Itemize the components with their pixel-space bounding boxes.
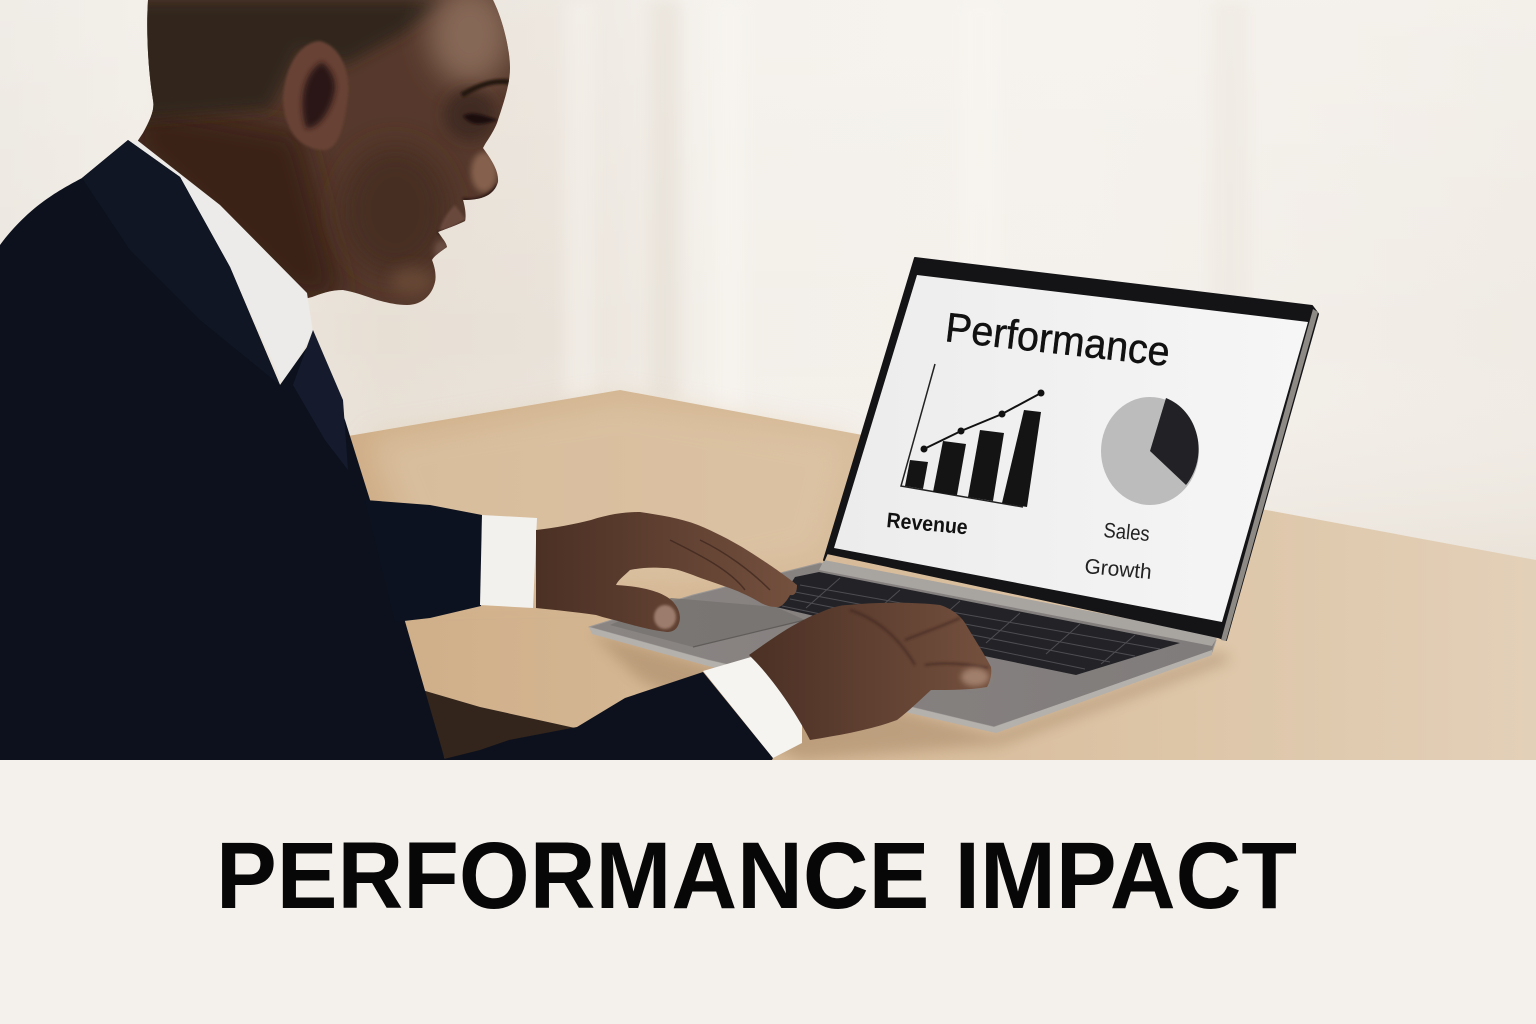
far cuff bbox=[480, 515, 537, 608]
eye socket bbox=[444, 89, 496, 141]
nose highlight bbox=[471, 152, 497, 192]
near hand bbox=[749, 603, 991, 740]
laptop base bbox=[589, 563, 1216, 727]
shirt collar bbox=[130, 140, 313, 385]
screen title: Performance bbox=[943, 304, 1172, 375]
trackpad bbox=[610, 598, 805, 647]
man in suit bbox=[0, 0, 991, 760]
background wall with curtains bbox=[0, 0, 1536, 760]
head and neck bbox=[138, 0, 510, 305]
eye bbox=[463, 113, 498, 124]
near sleeve bbox=[440, 672, 773, 760]
far hand bbox=[536, 512, 797, 632]
far sleeve bbox=[365, 500, 482, 622]
bar chart bbox=[901, 364, 1044, 507]
keyboard bbox=[776, 572, 1180, 675]
label: sales: Sales bbox=[1103, 519, 1151, 546]
suit jacket bbox=[0, 140, 445, 760]
table edge shadow bbox=[422, 690, 575, 760]
title: PERFORMANCE IMPACT bbox=[216, 823, 1297, 929]
wooden table bbox=[348, 390, 1536, 760]
cheek shadow bbox=[340, 145, 450, 275]
ear bbox=[283, 41, 348, 150]
laptop shadow bbox=[590, 632, 1232, 760]
label: revenue: Revenue bbox=[886, 509, 969, 539]
hair bbox=[130, 0, 450, 120]
forehead highlight bbox=[428, 0, 512, 85]
neck shadow bbox=[130, 100, 345, 300]
chin highlight bbox=[390, 268, 434, 296]
lips bbox=[440, 205, 466, 232]
laptop lid bbox=[824, 258, 1318, 640]
pie chart bbox=[1101, 397, 1199, 505]
brow bbox=[462, 82, 510, 95]
laptop bbox=[589, 258, 1318, 760]
tie bbox=[293, 330, 348, 470]
silver hinge strip bbox=[819, 560, 1218, 646]
laptop screen bbox=[834, 275, 1308, 622]
near cuff bbox=[703, 657, 802, 758]
label: growth: Growth bbox=[1084, 555, 1153, 584]
bottom banner bbox=[0, 760, 1536, 1024]
